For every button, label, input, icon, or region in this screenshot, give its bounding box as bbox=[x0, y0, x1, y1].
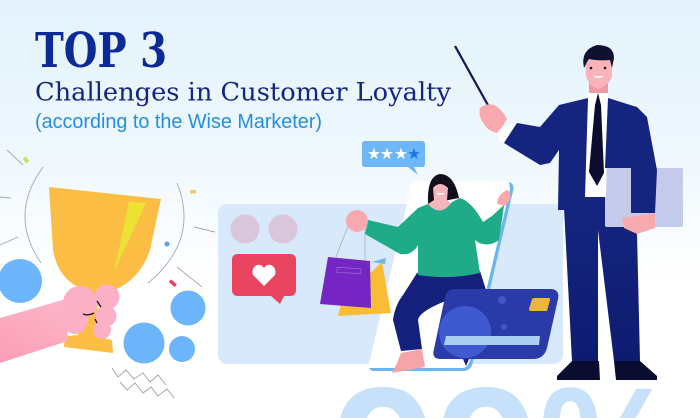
subheading: Challenges in Customer Loyalty bbox=[35, 78, 452, 108]
purple bag bbox=[320, 257, 371, 308]
shoe bbox=[392, 349, 425, 373]
title bbox=[35, 23, 452, 133]
hair bbox=[428, 174, 459, 204]
hair bbox=[583, 45, 614, 68]
trousers bbox=[564, 196, 640, 361]
pants bbox=[393, 271, 486, 351]
zigzag decoration bbox=[112, 368, 174, 398]
cup highlight bbox=[114, 202, 146, 272]
shopping bags bbox=[320, 226, 391, 316]
shirt bbox=[585, 93, 608, 197]
heading: top 3: TOP 3 bbox=[35, 23, 167, 79]
bag handles bbox=[336, 226, 365, 260]
jacket left bbox=[504, 98, 588, 210]
sweater bbox=[365, 198, 505, 277]
decorative burst lines bbox=[0, 150, 215, 287]
face bbox=[585, 58, 612, 89]
hand holding trophy bbox=[0, 284, 120, 363]
left hand bbox=[346, 210, 368, 232]
holding hand bbox=[622, 213, 655, 234]
card chip bbox=[529, 298, 550, 311]
background panel bbox=[218, 204, 563, 364]
finger creases bbox=[83, 301, 101, 323]
arm bbox=[0, 299, 68, 363]
trophy cup bbox=[49, 187, 161, 291]
facial features bbox=[590, 67, 606, 78]
star rating bubble bbox=[362, 141, 425, 175]
face and neck bbox=[428, 184, 451, 211]
fist bbox=[63, 284, 120, 339]
shirt cuff bbox=[498, 122, 515, 143]
credit card bbox=[433, 289, 558, 359]
necktie bbox=[589, 93, 604, 186]
yellow bag bbox=[338, 262, 391, 316]
card dots bbox=[498, 296, 507, 330]
pants tail bbox=[463, 359, 469, 366]
rating stars bbox=[367, 145, 421, 163]
big percentage figure bbox=[333, 380, 679, 418]
folder bbox=[605, 168, 683, 227]
presenter man bbox=[455, 45, 683, 380]
blue decorative circles bbox=[0, 259, 206, 364]
rating stars: ★ bbox=[367, 145, 381, 163]
rating stars: ★ bbox=[380, 145, 394, 163]
neck bbox=[589, 82, 608, 93]
card highlight bbox=[439, 306, 491, 358]
confetti bbox=[23, 156, 196, 287]
pointing hand bbox=[480, 104, 507, 133]
smartphone bbox=[368, 182, 514, 371]
phone edge bbox=[369, 182, 514, 371]
rating stars: ★ bbox=[394, 145, 408, 163]
right hand bbox=[497, 190, 511, 206]
jacket right bbox=[605, 98, 657, 213]
shopping woman bbox=[346, 174, 511, 373]
pointer stick bbox=[455, 46, 489, 107]
icon: heart bbox=[252, 265, 276, 286]
trophy bbox=[49, 187, 161, 353]
smile bbox=[436, 193, 445, 195]
trophy stem and base bbox=[64, 285, 113, 353]
card stripe bbox=[444, 336, 540, 345]
shoes bbox=[557, 361, 657, 380]
source line: (according to the Wise Marketer) bbox=[35, 110, 322, 133]
avatar placeholders bbox=[230, 214, 298, 244]
heart speech bubble bbox=[232, 254, 296, 304]
rating stars: ★ bbox=[407, 145, 421, 163]
